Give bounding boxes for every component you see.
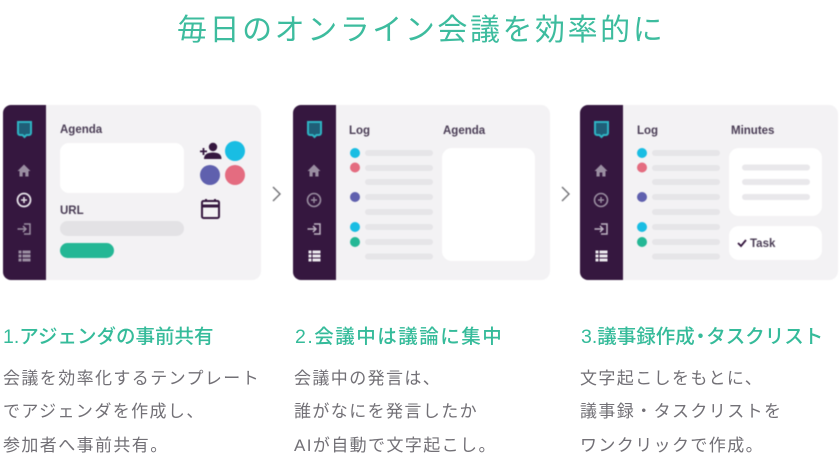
step 2 description: 会議中の発言は、: [294, 369, 441, 388]
step 1 description: [3, 369, 260, 455]
task box: Task: [750, 238, 776, 250]
title: 毎日のオンライン会議を効率的に: [177, 14, 665, 47]
step 1 heading: 1.アジェンダの事前共有: [3, 326, 213, 348]
arrow: [562, 187, 569, 201]
step 3 description: 議事録・タスクリストを: [580, 402, 782, 421]
step 2 description: 誰がなにを発言したか: [294, 402, 478, 421]
panel: log and minutes screen: [580, 105, 838, 280]
heading: Log: Log: [637, 125, 658, 137]
url field: [60, 221, 184, 236]
minutes box: [729, 148, 822, 216]
task box: [729, 226, 822, 260]
log entries: [637, 148, 720, 260]
step 2 heading: 2.会議中は議論に集中: [295, 326, 503, 348]
step 2 description: AIが自動で文字起こし。: [294, 436, 497, 455]
sidebar: [3, 105, 46, 280]
log entries: [350, 148, 433, 260]
step 1 description: 参加者へ事前共有。: [3, 436, 169, 455]
step 3 description: [580, 369, 782, 455]
arrow: [273, 187, 280, 201]
heading: Minutes: Minutes: [731, 125, 774, 137]
step 1 description: でアジェンダを作成し、: [3, 402, 205, 421]
agenda box: [60, 143, 184, 193]
step 2 description: [294, 369, 497, 455]
icon: calendar: [202, 199, 219, 218]
panel: log and agenda screen: [293, 105, 550, 280]
step 1 description: 会議を効率化するテンプレート: [3, 369, 260, 388]
heading: Log: Log: [349, 125, 370, 137]
participant avatars: [200, 141, 245, 185]
step 3 description: 文字起こしをもとに、: [580, 369, 763, 388]
icon: add participant: [200, 143, 222, 159]
green button: [60, 243, 114, 258]
step 3 heading: 3.議事録作成・タスクリスト: [581, 326, 823, 348]
panel: agenda screen: [3, 105, 261, 280]
heading: Agenda: Agenda: [60, 124, 103, 136]
sidebar: [293, 105, 336, 280]
label: URL: URL: [60, 205, 84, 217]
step 3 description: ワンクリックで作成。: [580, 436, 764, 455]
sidebar: [580, 105, 623, 280]
agenda box: [442, 148, 535, 261]
heading: Agenda: Agenda: [443, 125, 486, 137]
